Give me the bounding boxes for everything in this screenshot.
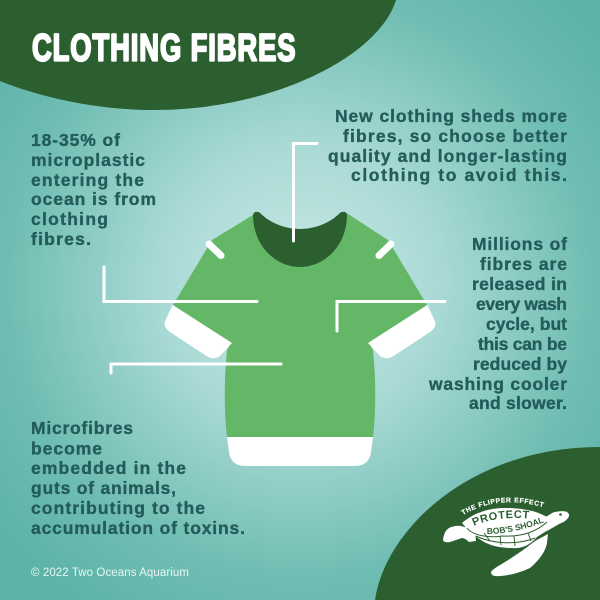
text: microplastic share: entering the — [31, 170, 144, 190]
collar — [253, 212, 347, 267]
logo arc path 2 — [474, 518, 540, 526]
text: washing: Millions of — [472, 234, 567, 254]
text: microfibres: embedded in the — [31, 458, 186, 478]
connector: right — [337, 302, 445, 331]
connector: top — [294, 144, 317, 241]
left cuff — [165, 305, 232, 358]
connector: bottom — [111, 364, 281, 373]
text: washing — [428, 234, 567, 413]
logo arc path — [463, 502, 549, 515]
text: washing: released in — [472, 274, 567, 294]
turtle rear flipper — [443, 526, 476, 542]
text: microfibres: contributing to the — [31, 498, 205, 518]
text: new clothing: quality and longer-lasting — [328, 146, 567, 166]
title banner — [0, 0, 396, 110]
text: new clothing — [328, 106, 567, 185]
text: microfibres — [31, 418, 245, 538]
text: washing: fibres are — [480, 254, 567, 274]
left shoulder seam — [209, 244, 221, 256]
right shoulder seam — [379, 244, 391, 256]
text: microfibres: become — [31, 438, 102, 458]
text: microplastic share: clothing — [31, 209, 108, 229]
turtle head — [544, 511, 569, 531]
text: microfibres: Microfibres — [31, 418, 133, 438]
text: washing: washing cooler — [428, 374, 567, 394]
copyright: © 2022 Two Oceans Aquarium — [31, 567, 189, 579]
text: new clothing: fibres, so choose better — [343, 126, 567, 146]
shirt body — [173, 212, 427, 438]
turtle front flipper — [491, 534, 548, 576]
logo panel — [375, 447, 600, 600]
text: microfibres: guts of animals, — [31, 478, 176, 498]
shell scutes — [467, 522, 547, 546]
text: washing: reduced by — [473, 354, 567, 374]
text: microplastic share: microplastic — [31, 150, 145, 170]
text: washing: every wash — [476, 294, 567, 314]
text: microfibres: accumulation of toxins. — [31, 518, 245, 538]
connector: left — [104, 267, 257, 302]
title: CLOTHING FIBRES — [32, 27, 296, 70]
t-shirt icon — [165, 212, 435, 466]
logo: turtle — [443, 498, 570, 576]
text: microplastic share: fibres. — [31, 229, 91, 249]
text: washing: and slower. — [469, 393, 567, 413]
text: new clothing: New clothing sheds more — [335, 106, 567, 126]
logo tagline: THE FLIPPER EFFECT — [460, 498, 544, 514]
turtle shell — [462, 508, 548, 548]
text: washing: this can be — [478, 334, 567, 354]
text: microplastic share: ocean is from — [31, 189, 156, 209]
logo arc path 3 — [487, 520, 550, 534]
hem — [227, 437, 373, 466]
turtle eye — [559, 513, 562, 516]
text: washing: cycle, but — [486, 314, 567, 334]
text: microplastic share: 18-35% of — [31, 130, 120, 150]
right cuff — [368, 305, 435, 358]
logo protect: PROTECT — [472, 510, 530, 526]
logo bob's shoal: BOB'S SHOAL — [487, 518, 544, 534]
text: microplastic share — [31, 130, 156, 249]
text: new clothing: clothing to avoid this. — [351, 165, 567, 185]
